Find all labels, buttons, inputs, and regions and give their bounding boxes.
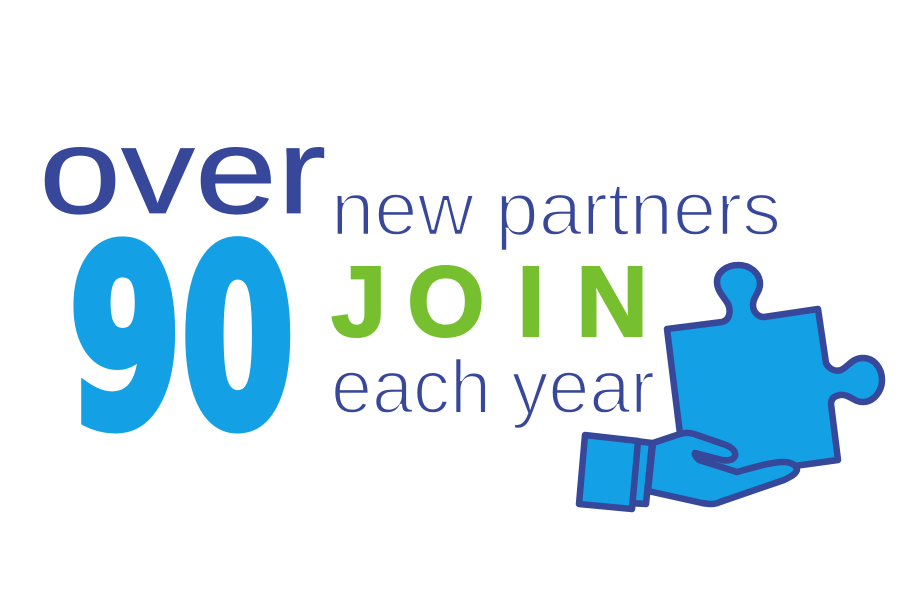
text: each year: each year: [331, 345, 655, 430]
text: JOIN: JOIN: [331, 246, 648, 358]
puzzle piece: [667, 265, 882, 478]
cuff band: [630, 441, 652, 504]
text: new partners: new partners: [331, 167, 781, 252]
hand: [648, 433, 797, 504]
icon: puzzle piece held by hand: [579, 265, 882, 509]
big number: 90: 90: [69, 196, 294, 482]
cuff: [579, 435, 638, 509]
heading: over: over: [39, 102, 326, 239]
